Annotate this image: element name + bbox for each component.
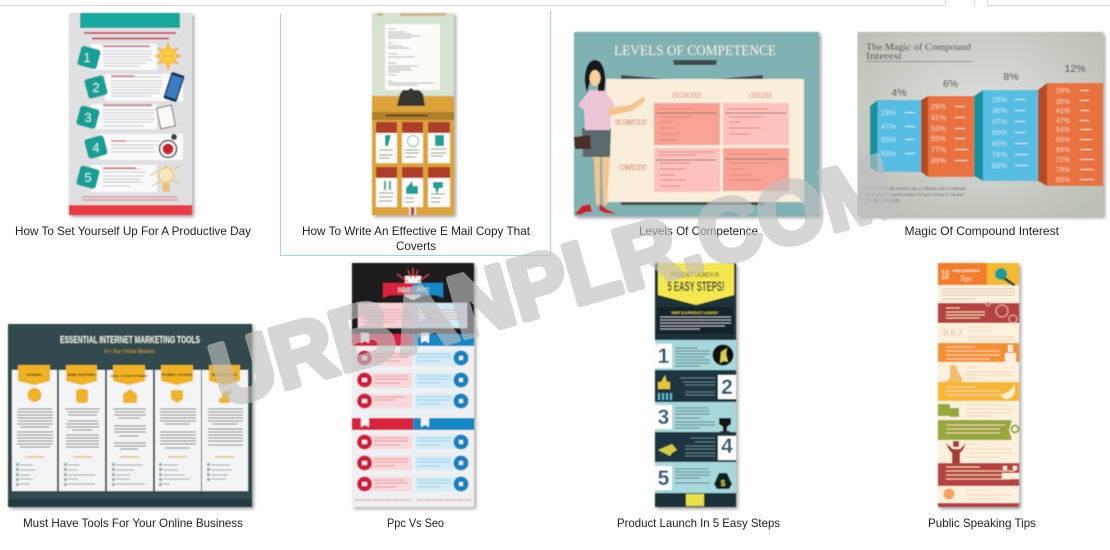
column text: [17, 409, 243, 449]
footer ribbon: [409, 207, 416, 215]
icon: digits: 887: [943, 328, 963, 339]
number box 1: [655, 344, 672, 368]
icon: trophy: [719, 418, 731, 432]
label 6%: 6%: [943, 78, 958, 90]
icon: speaker: [945, 365, 962, 382]
icon: brain: [944, 488, 954, 500]
paper text lines: [388, 29, 434, 85]
dotted divider: [355, 499, 472, 501]
bar 12 percent: 41%: [1056, 108, 1070, 115]
bar 12 percent: 66%: [1056, 147, 1070, 154]
section bar one: [352, 334, 413, 346]
cream background: [938, 263, 1019, 507]
footnote: [866, 186, 966, 204]
intro lines: [660, 317, 731, 329]
teal background: [574, 32, 819, 216]
dark background: [655, 263, 736, 507]
light body: [352, 263, 474, 507]
column sub headings: [25, 456, 234, 458]
icon: timer: [160, 134, 177, 158]
bar 8 percent: 74%: [992, 150, 1007, 159]
footnote: Divide 72 by the interest rate or inflation rate to estimate: [866, 186, 966, 192]
columns: [12, 370, 248, 491]
band text: [946, 308, 1015, 499]
numbered clock 4: 4: [92, 140, 100, 155]
intro text: [361, 310, 464, 322]
yellow header: [987, 263, 1019, 285]
thumbnail: levels of competence: [574, 32, 819, 216]
label: Magic Of Compound Interest: [904, 224, 1060, 238]
bar 8 percent: 56%: [992, 128, 1007, 137]
footnote: the number of years it takes for your money to "double": [866, 192, 965, 198]
woman illustration: [574, 60, 645, 215]
label 4%: 4%: [891, 87, 907, 99]
icon: bananas: [1000, 385, 1015, 399]
row text lines: [103, 47, 162, 186]
bar 6 percent: 65%: [931, 134, 946, 143]
icon bubble: [712, 344, 734, 366]
numbered clock 2: [84, 75, 108, 99]
bar 6 percent: 41%: [931, 113, 946, 122]
row heading: COMPETENT: [619, 163, 647, 172]
bar 12 percent: [1038, 63, 1103, 186]
subtitle ribbon: [673, 60, 717, 65]
number box 5: 5: [658, 467, 670, 490]
heading script: Tips: [960, 275, 972, 283]
bar 4 percent: 65%: [881, 135, 896, 144]
title: LEVELS OF COMPETENCE: [614, 43, 776, 59]
intro panels: [358, 303, 413, 328]
label: Coverts: [396, 239, 436, 253]
row text: [675, 348, 715, 483]
matrix cells: [654, 103, 789, 192]
color bands: [938, 303, 1019, 507]
black header: [352, 263, 474, 334]
banner label: email autoresponder: EMAIL AUTORESPONDER: [110, 374, 149, 378]
heading large: 5 EASY STEPS!: [668, 278, 724, 294]
explorer toolbar: [0, 0, 1110, 6]
numbered clock 2: 2: [92, 80, 100, 95]
icon: speech bubbles: [938, 404, 959, 417]
thumbnail: email copy: [372, 13, 454, 215]
icon: people: [658, 393, 672, 400]
section bar two: [352, 418, 413, 430]
number box 2: [718, 375, 736, 399]
label: ppc: PPC: [417, 288, 430, 294]
number box 4: 4: [721, 435, 733, 458]
pale green background: [372, 13, 454, 96]
icon: person silhouette: [1005, 345, 1016, 362]
bar 8 percent: 29%: [992, 95, 1007, 104]
row heading: INCOMPETENT: [615, 118, 647, 127]
bar 8 percent: 83%: [992, 161, 1007, 170]
bar 12 percent: 85%: [1056, 177, 1070, 184]
label 8%: 8%: [1003, 71, 1019, 83]
thumbnail: product launch: [655, 263, 736, 507]
icon: plants: [658, 444, 677, 456]
tip headings: [103, 46, 152, 168]
icon: sun: [154, 42, 182, 71]
closing red lines: [82, 197, 178, 200]
bar 8 percent: 36%: [992, 106, 1007, 115]
column heading: CONCIOUS: [749, 91, 772, 100]
heading words: PUBLIC SPEAKING: [952, 269, 980, 273]
banner label: social tool: SOCIAL TOOL: [212, 373, 238, 377]
row text: [374, 354, 408, 487]
title second line: Interest: [866, 52, 902, 62]
tip cards: [376, 122, 450, 207]
bar 12 percent: 54%: [1056, 127, 1070, 134]
bar 6 percent: 53%: [931, 124, 946, 133]
folded top strip: [621, 75, 763, 79]
bar 12 percent: 47%: [1056, 118, 1070, 125]
bar 12 percent: 35%: [1056, 99, 1070, 106]
cream panel: [606, 79, 804, 202]
thumbnail: internet marketing tools: [8, 324, 252, 507]
icon: microphone: [995, 268, 1016, 286]
card icons: [384, 135, 444, 195]
thumbnail: public speaking tips: [938, 263, 1019, 507]
dark background: [8, 324, 252, 507]
bar 8 percent: 65%: [992, 139, 1007, 148]
icon: audience: [1002, 466, 1019, 479]
banner label: web hosting: WEB HOSTING: [68, 373, 95, 377]
number box 1: 1: [658, 345, 670, 368]
bar 12 percent: 29%: [1056, 88, 1070, 95]
yellow banners: [18, 365, 240, 385]
number box 3: 3: [658, 406, 669, 429]
pink and blue rows: [364, 351, 412, 491]
icon: light bulb: [150, 165, 180, 191]
label: Must Have Tools For Your Online Business: [23, 516, 243, 530]
intro heading: WHAT IS A PRODUCT LAUNCH?: [672, 310, 719, 315]
thumbnail: compound interest: [858, 32, 1103, 216]
numbered clock 5: 5: [84, 170, 92, 185]
crown sticks: [397, 268, 429, 282]
title: ESSENTIAL INTERNET MARKETING TOOLS: [60, 335, 200, 346]
bar 4 percent: [870, 87, 921, 172]
card headers: [376, 122, 450, 178]
banner label: domain: DOMAIN: [26, 373, 42, 377]
bar 12 percent: 60%: [1056, 137, 1070, 144]
bar 6 percent: 89%: [931, 156, 946, 165]
icon: confident figure: [946, 441, 966, 463]
footer badge: [686, 494, 704, 506]
icon glyph centers: [362, 356, 463, 486]
bar 6 percent: 29%: [931, 102, 946, 111]
number box 3: [655, 405, 672, 429]
bookmarks: [361, 333, 429, 343]
white paper: [385, 24, 440, 90]
label: How To Set Yourself Up For A Productive Day: [15, 224, 251, 238]
footnote: (or be halved): [866, 198, 899, 204]
thumbnail: ppc vs seo: [352, 263, 474, 507]
column heading: UNCONCIOUS: [672, 91, 701, 100]
bar 6 percent: [921, 78, 974, 177]
red icons: [357, 350, 372, 492]
top strip: [376, 13, 446, 16]
heading line: [386, 114, 428, 116]
label: Ppc Vs Seo: [387, 516, 444, 530]
numbered clock 3: 3: [84, 110, 92, 125]
bookmarks: [361, 417, 429, 427]
numbered clock 4: [84, 135, 108, 159]
label: seo: SEO: [398, 288, 411, 294]
thumbnail: productive day: [69, 13, 192, 215]
check boxes: [16, 463, 210, 486]
label 12%: 12%: [1064, 63, 1086, 75]
red footer: [69, 205, 192, 215]
bar 4 percent: 47%: [881, 122, 896, 131]
icon: gear: [1012, 426, 1018, 432]
numbered clock 5: [76, 165, 100, 190]
typewriter icon: [397, 88, 425, 106]
blue ribbon: [413, 283, 443, 298]
subtitle: For Your Online Business: [103, 349, 156, 355]
heading number: 10: [941, 267, 949, 282]
label: Product Launch In 5 Easy Steps: [617, 516, 780, 530]
icon: money bag: $: [721, 479, 726, 488]
label: Public Speaking Tips: [928, 516, 1036, 530]
bottom strip: [621, 202, 764, 205]
icon: clipboard: [156, 105, 176, 129]
intro text: [942, 289, 1015, 299]
stopwatch icon: [408, 136, 418, 146]
bar 4 percent: 83%: [881, 149, 896, 158]
column icons: [28, 388, 232, 403]
icon: thumbs up: [658, 375, 670, 389]
red ribbon: [383, 283, 413, 298]
number box 4: [718, 435, 736, 460]
bar 8 percent: 47%: [992, 117, 1007, 126]
number box 5: [655, 466, 672, 490]
card text lines: [379, 149, 446, 202]
checklists: [20, 465, 232, 484]
blue icons: [454, 350, 468, 492]
step rows: [655, 340, 736, 493]
icon: phone: [163, 72, 185, 102]
shield: [405, 276, 421, 300]
bar 6 percent: 77%: [931, 145, 946, 154]
label: How To Write An Effective E Mail Copy That: [302, 224, 531, 238]
selection outline: [280, 10, 550, 256]
intro box: [657, 307, 733, 334]
number box 2: 2: [721, 376, 733, 399]
yellow banner: [658, 263, 734, 305]
heading band: [372, 112, 454, 120]
bar 12 percent: 72%: [1056, 157, 1070, 164]
heading small: PRODUCT LAUNCH IN: [671, 270, 719, 279]
label: Levels Of Competence: [639, 224, 758, 238]
bottom band: [8, 499, 252, 507]
bar 12 percent: 78%: [1056, 167, 1070, 174]
white tip rows: [91, 44, 183, 192]
bar 4 percent: 29%: [881, 108, 896, 117]
orange background: [372, 96, 454, 215]
intro red lines: [84, 33, 176, 38]
banner label: payment gateway: PAYMENT GATEWAY: [161, 373, 194, 377]
sheet background: [69, 13, 192, 215]
numbered clock 1: [77, 45, 101, 70]
orange header: [938, 263, 987, 285]
title underline: [866, 60, 973, 62]
numbered clock 3: [76, 105, 100, 130]
gradient background: [858, 32, 1103, 216]
title: The Magic of Compound: [866, 42, 971, 53]
numbered clock 1: 1: [83, 50, 91, 65]
icon: money bag: [714, 473, 732, 489]
watermark: URBANPLR.COM: [200, 136, 905, 425]
teal header: [80, 13, 180, 28]
icon: emoticons: [986, 302, 1017, 323]
bar 8 percent: [974, 71, 1038, 181]
